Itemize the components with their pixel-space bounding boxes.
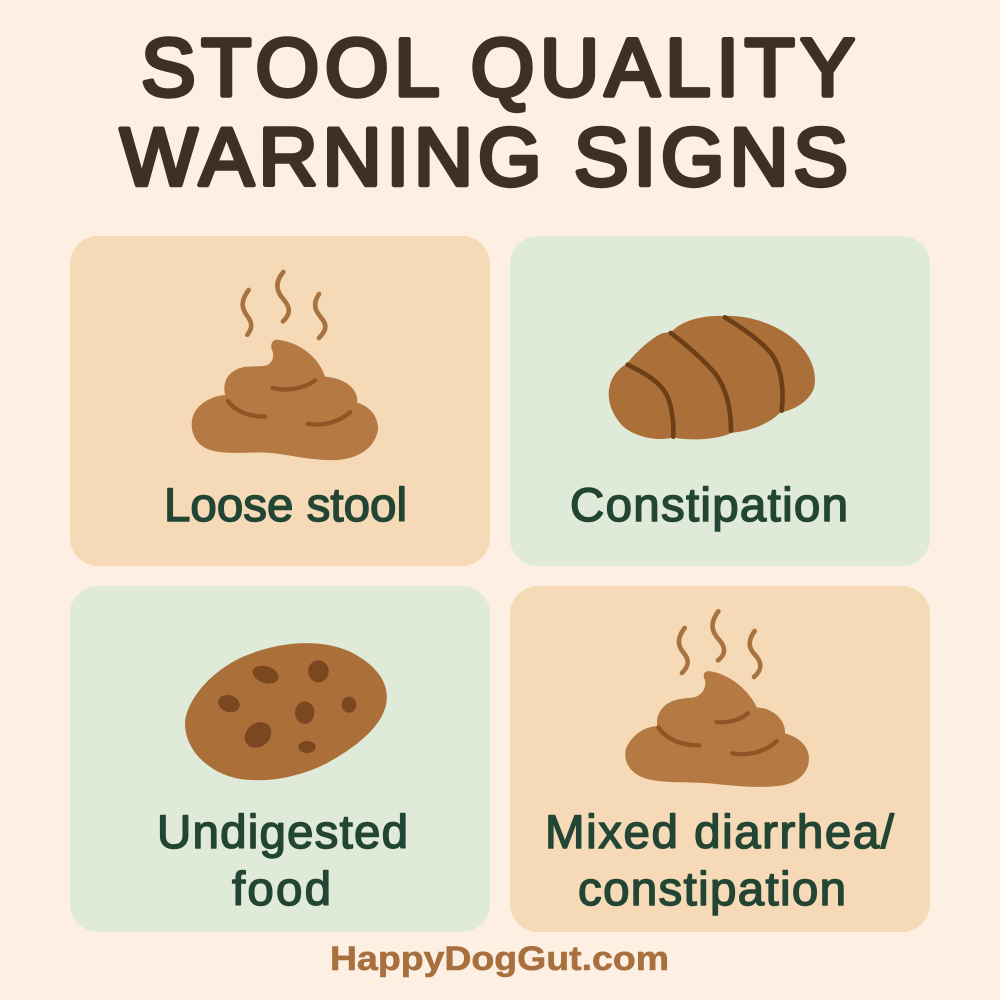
panel: mixed diarrhea/constipation (510, 586, 930, 932)
icon: loose stool pile with steam (192, 272, 378, 460)
icon: mixed stool pile with steam (625, 611, 809, 787)
panel: undigested food (70, 586, 490, 932)
icon: segmented hard stool (609, 316, 815, 439)
icon: stool with undigested pieces (185, 643, 387, 780)
label: constipation: Constipation (570, 479, 848, 532)
label: undigested food (157, 806, 408, 916)
website footer: HappyDogGut.com (330, 940, 669, 978)
panel: constipation (510, 236, 930, 566)
label: undigested food: food (232, 863, 331, 916)
title: WARNING SIGNS (120, 112, 848, 203)
panel: loose stool (70, 236, 490, 566)
label: loose stool: Loose stool (164, 479, 407, 532)
label: mixed diarrhea/constipation: Mixed diarrhea/ (545, 806, 895, 859)
label: undigested food: Undigested (157, 806, 408, 859)
label: mixed diarrhea/constipation: constipation (578, 863, 846, 916)
title: STOOL QUALITY (141, 22, 855, 114)
label: mixed diarrhea/constipation (545, 806, 895, 916)
title (120, 22, 855, 203)
